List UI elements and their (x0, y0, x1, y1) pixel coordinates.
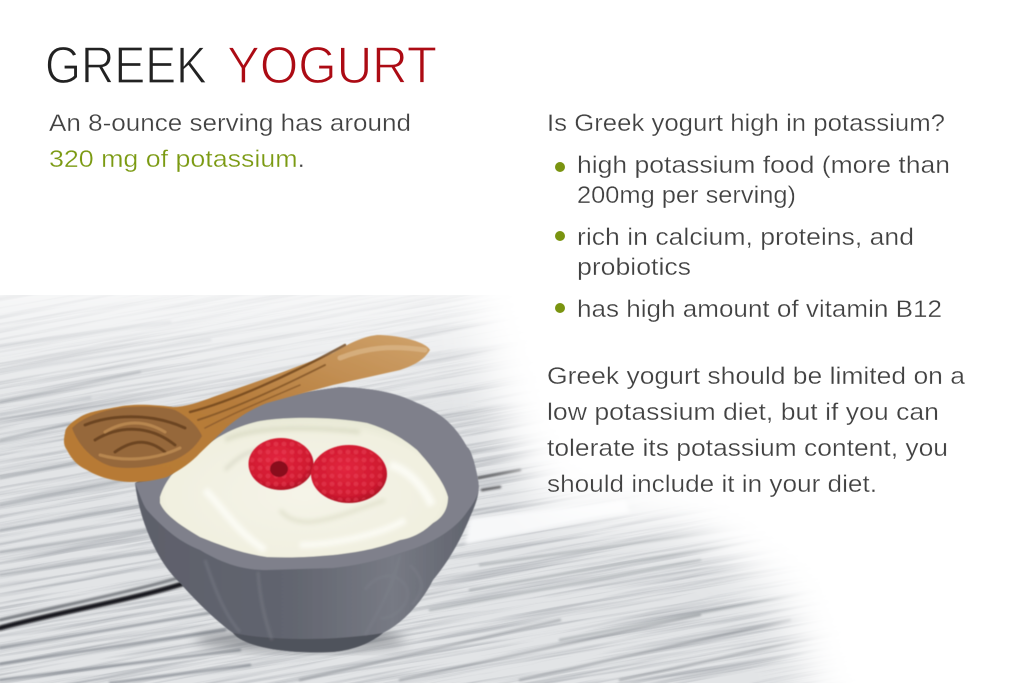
bullet list (555, 152, 950, 323)
intro text: An 8-ounce serving has around (49, 110, 411, 137)
raspberry left (248, 438, 314, 490)
wooden spoon (64, 335, 430, 482)
background photo: white wooden table (0, 295, 824, 683)
bullet 2: probiotics (577, 254, 691, 281)
grey ceramic bowl (135, 387, 479, 652)
title: YOGURT (227, 37, 437, 95)
bullet 1: high potassium food (more than (577, 152, 950, 179)
intro text (49, 110, 411, 173)
question heading: Is Greek yogurt high in potassium? (547, 110, 945, 137)
bullet 1 (555, 152, 950, 209)
intro text: 320 mg of potassium . (49, 146, 305, 173)
bowl outer body (135, 387, 479, 652)
bullet 3: has high amount of vitamin B12 (577, 296, 942, 323)
raspberries (248, 438, 387, 503)
closing paragraph: should include it in your diet. (547, 471, 877, 498)
bowl base band (233, 633, 383, 652)
yogurt (160, 418, 448, 557)
closing paragraph (547, 363, 966, 498)
bowl rim and interior (135, 387, 479, 570)
bullet 2: rich in calcium, proteins, and (577, 224, 914, 251)
bullet 2 (555, 224, 914, 281)
spoon hollow (72, 407, 202, 468)
closing paragraph: low potassium diet, but if you can (547, 399, 939, 426)
spoon grain (85, 345, 425, 459)
bullet 1: 200mg per serving) (577, 182, 796, 209)
bowl facets (205, 555, 422, 640)
title (45, 37, 437, 95)
closing paragraph: tolerate its potassium content, you (547, 435, 948, 462)
bowl shadow (195, 629, 405, 651)
title: GREEK (45, 37, 207, 95)
yogurt swirls (205, 428, 432, 550)
closing paragraph: Greek yogurt should be limited on a (547, 363, 966, 390)
raspberry right (311, 445, 387, 503)
spoon body (64, 335, 430, 482)
